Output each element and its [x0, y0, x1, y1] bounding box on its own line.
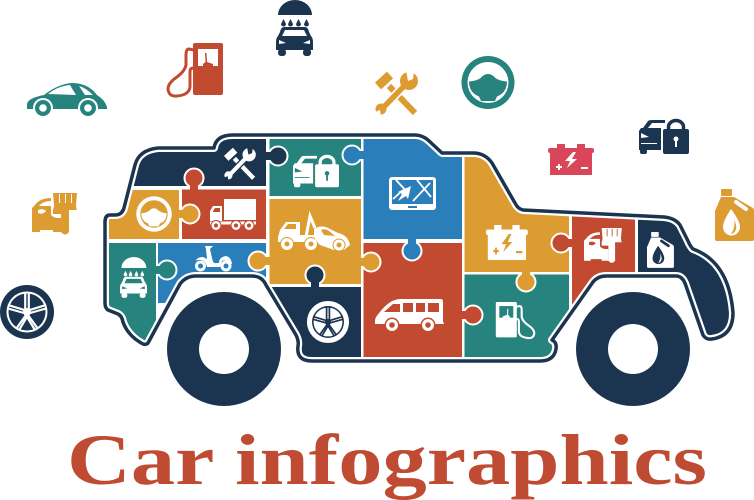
puzzle pieces — [109, 139, 729, 357]
front wheel — [167, 292, 281, 406]
icon: map in piece — [389, 177, 436, 210]
icon: car wash in piece — [120, 257, 147, 298]
icon: tow truck in piece — [278, 216, 350, 252]
icon: fuel pump — [168, 43, 223, 96]
icon: bus in piece — [375, 299, 444, 332]
panel: map piece — [364, 130, 462, 239]
icon: fuel pump in piece — [496, 302, 534, 338]
icon: battery in piece — [486, 225, 528, 260]
rear wheel — [576, 292, 690, 406]
icon: car lock — [639, 120, 691, 155]
icon: tools in piece — [224, 147, 256, 181]
icon: oil canister in piece — [647, 232, 674, 268]
panel: fuel piece — [464, 274, 569, 364]
icon: car battery — [548, 144, 594, 175]
icon: car wash — [276, 0, 313, 56]
panel: truck piece — [182, 190, 266, 239]
title: Car infographics — [67, 420, 707, 500]
car outline — [105, 135, 733, 361]
panel: lock piece — [270, 139, 361, 196]
icon: steering wheel — [462, 56, 514, 109]
puzzle connectors — [153, 146, 575, 324]
icon: teal car — [27, 83, 107, 118]
panel: paint piece — [572, 216, 635, 305]
panel: wheel piece — [272, 287, 361, 357]
panel: oil piece — [638, 220, 729, 336]
icon: steering wheel in piece — [136, 196, 172, 232]
icon: tools — [375, 70, 418, 116]
icon: car paint brush — [32, 193, 77, 234]
icon: oil canister — [715, 189, 754, 241]
icon: alloy wheel — [0, 285, 54, 339]
panel: battery piece — [464, 157, 569, 272]
panel: tow truck piece — [270, 199, 361, 284]
icon: truck in piece — [210, 199, 256, 231]
car puzzle body — [100, 130, 738, 406]
icon: alloy wheel in piece — [307, 301, 349, 343]
panel: tools piece — [134, 139, 266, 186]
icon: scooter in piece — [195, 246, 232, 272]
icon: car lock in piece — [293, 156, 341, 188]
panel: car wash piece — [109, 243, 156, 340]
panel: steering piece — [109, 190, 179, 239]
panel: bus piece — [364, 243, 462, 363]
panel: scooter piece — [158, 243, 266, 303]
icon: paint brush in piece — [584, 228, 622, 263]
